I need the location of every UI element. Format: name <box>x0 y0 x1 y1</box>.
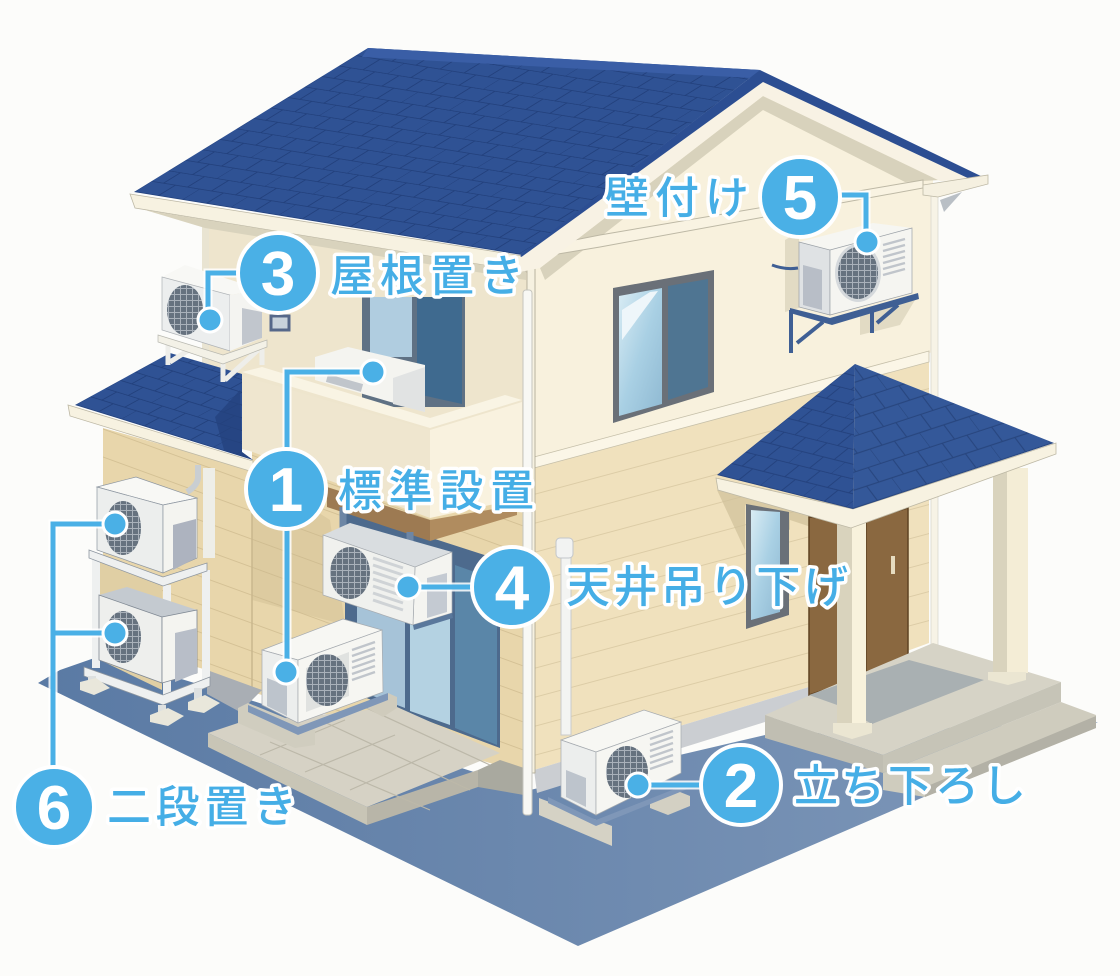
sliding door <box>345 510 500 748</box>
porch roof <box>716 364 1056 528</box>
callout 5: 壁付け <box>605 157 840 237</box>
floor band <box>534 351 929 468</box>
unit 6: double stacked <box>80 477 220 726</box>
balcony <box>242 367 522 541</box>
balcony window <box>362 297 465 407</box>
porch roof shadow <box>717 490 850 550</box>
callout 1: 標準設置 <box>246 449 534 529</box>
callout 4: 天井吊り下げ <box>472 547 848 627</box>
callout 4: 天井吊り下げ: 天井吊り下げ <box>566 563 848 612</box>
rack <box>96 560 206 700</box>
callout 1: 標準設置: 1 <box>269 456 303 525</box>
callout 3: 屋根置き: 3 <box>261 240 295 309</box>
upper right window <box>613 270 714 423</box>
lower right window <box>746 504 789 629</box>
terrace <box>208 705 524 825</box>
callout 4: 天井吊り下げ: 4 <box>495 554 530 623</box>
callout 6: 二段置き: 6 <box>37 774 71 843</box>
balcony unit <box>315 347 425 412</box>
right foundation <box>534 687 809 793</box>
left upper wall <box>205 215 530 520</box>
porch floor <box>765 643 1096 797</box>
unit 5: wall mounted <box>772 223 919 353</box>
gable wall <box>530 95 933 458</box>
unit 1: standard <box>238 619 397 748</box>
lower left roof <box>68 353 253 472</box>
unit 3: roof mounted <box>158 265 267 382</box>
ground <box>38 655 1098 946</box>
right siding wall <box>534 362 929 770</box>
callout lines <box>53 195 866 806</box>
callout 6: 二段置き <box>14 767 297 847</box>
house walls <box>103 95 940 793</box>
callout 5: 壁付け: 5 <box>783 164 817 233</box>
unit 4: ceiling hung <box>323 507 453 630</box>
main roof <box>130 48 988 280</box>
wall vent <box>271 316 289 330</box>
callout 2: 立ち下ろし: 2 <box>724 752 758 821</box>
callout 3: 屋根置き: 屋根置き <box>330 252 524 301</box>
callout 6: 二段置き: 二段置き <box>107 783 297 832</box>
entrance door <box>809 508 908 695</box>
gable band <box>534 180 923 258</box>
pipes <box>187 290 573 815</box>
left foundation <box>207 670 262 712</box>
callout 1: 標準設置: 標準設置 <box>338 467 534 516</box>
callout 5: 壁付け: 壁付け <box>605 174 749 223</box>
porch columns <box>833 468 1028 739</box>
left middle wall <box>252 440 530 775</box>
callout 2: 立ち下ろし <box>701 745 1026 825</box>
callout 2: 立ち下ろし: 立ち下ろし <box>794 762 1026 811</box>
callout 3: 屋根置き <box>238 233 524 313</box>
unit 2: drop-down <box>539 710 690 846</box>
left lower wall <box>103 428 252 692</box>
corner trims <box>527 268 535 773</box>
callout dots <box>103 230 879 797</box>
